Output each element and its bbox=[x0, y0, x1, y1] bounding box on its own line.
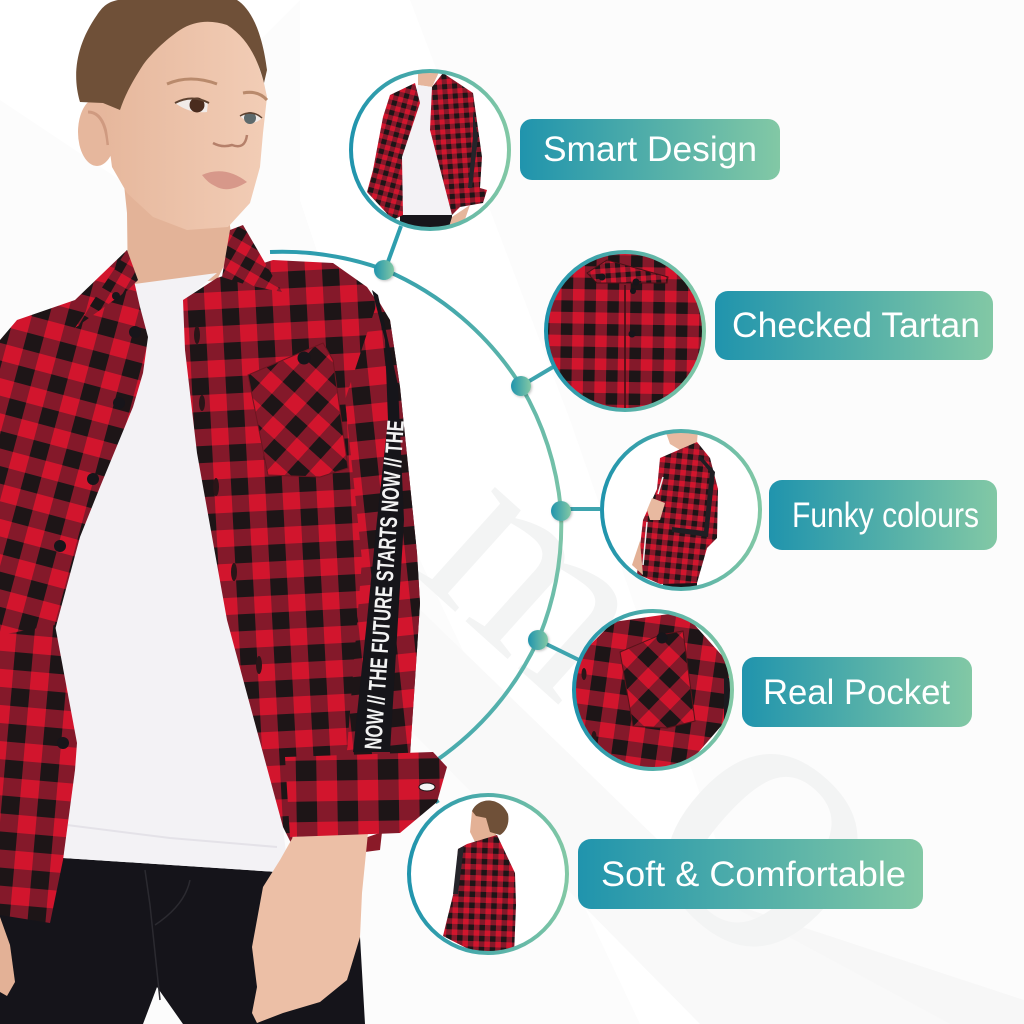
connector nodes bbox=[374, 260, 571, 650]
ear bbox=[78, 98, 116, 166]
tape bbox=[468, 110, 478, 188]
collar right bbox=[222, 225, 282, 292]
eyes and brows bbox=[167, 79, 267, 124]
detail circle: soft and comfortable bbox=[409, 795, 567, 955]
tape lettering: NOW // THE FUTURE STARTS NOW // THE bbox=[360, 419, 410, 750]
jeans bbox=[663, 583, 697, 587]
button bbox=[656, 634, 666, 644]
rolled cuff bbox=[285, 752, 447, 837]
label: checked tartan: Checked Tartan bbox=[732, 306, 980, 345]
neck and face bbox=[470, 811, 497, 842]
t-shirt bbox=[55, 273, 287, 872]
label: checked tartan bbox=[715, 291, 993, 360]
shirt bbox=[637, 442, 718, 584]
detail circle: checked tartan bbox=[540, 250, 710, 420]
buttons bbox=[598, 274, 640, 338]
placket flap bbox=[587, 260, 668, 283]
sleeve panel bbox=[345, 300, 420, 775]
forearm bbox=[632, 541, 643, 575]
mouth bbox=[202, 171, 247, 189]
nose bbox=[213, 135, 247, 146]
shirt back bbox=[443, 835, 516, 955]
label: soft and comfortable: Soft & Comfortable bbox=[601, 855, 906, 894]
t-shirt bbox=[402, 85, 452, 215]
hand bbox=[647, 498, 665, 520]
face bbox=[103, 20, 267, 230]
connector arc bbox=[270, 252, 561, 760]
watermark lettering bbox=[373, 400, 1013, 1024]
tartan cloth bbox=[576, 614, 729, 767]
right shirt panel and sleeve bbox=[183, 260, 420, 847]
jeans stitching bbox=[145, 870, 190, 1000]
hair bbox=[472, 800, 508, 835]
label: soft and comfortable bbox=[578, 839, 923, 909]
chest pocket bbox=[248, 343, 348, 477]
watermark lettering: m bbox=[373, 400, 716, 750]
tape edge bbox=[724, 678, 730, 720]
label: funky colours: Funky colours bbox=[792, 496, 979, 535]
skin bbox=[418, 70, 470, 230]
tape bbox=[672, 455, 715, 537]
cuff buttonhole bbox=[419, 783, 435, 791]
forearm and hand bbox=[252, 833, 368, 1023]
right panel buttonholes bbox=[194, 326, 262, 674]
tee hem line bbox=[67, 825, 277, 847]
tape bbox=[453, 846, 464, 894]
label: funky colours bbox=[769, 480, 997, 550]
hair bbox=[76, 0, 267, 110]
jeans bbox=[400, 214, 452, 227]
pocket button bbox=[298, 352, 310, 364]
tartan cloth bbox=[548, 254, 702, 408]
label: real pocket: Real Pocket bbox=[763, 673, 950, 712]
label: smart design: Smart Design bbox=[543, 130, 757, 169]
boy figure bbox=[0, 0, 447, 1024]
side buttonholes bbox=[582, 668, 596, 743]
collar left bbox=[75, 250, 138, 328]
detail circle: funky colours bbox=[602, 430, 760, 592]
left panel buttons bbox=[54, 292, 141, 749]
neck bbox=[122, 165, 233, 290]
front placket bbox=[643, 477, 663, 565]
placket seam bbox=[624, 285, 626, 410]
pocket bbox=[620, 631, 695, 728]
head bbox=[666, 433, 698, 450]
left panel lower bbox=[0, 625, 77, 923]
label: real pocket bbox=[742, 657, 972, 727]
shirt left bbox=[367, 83, 420, 220]
left shirt panel bbox=[0, 250, 148, 640]
under cuff tab bbox=[365, 832, 382, 852]
label: smart design bbox=[520, 119, 780, 180]
jeans bbox=[0, 858, 365, 1024]
detail circle: real pocket bbox=[570, 611, 735, 770]
connector spokes bbox=[385, 226, 600, 803]
left hand bbox=[0, 917, 15, 996]
shirt right bbox=[430, 73, 487, 215]
sleeve tape bbox=[353, 290, 410, 752]
detail circle: smart design bbox=[351, 70, 509, 230]
